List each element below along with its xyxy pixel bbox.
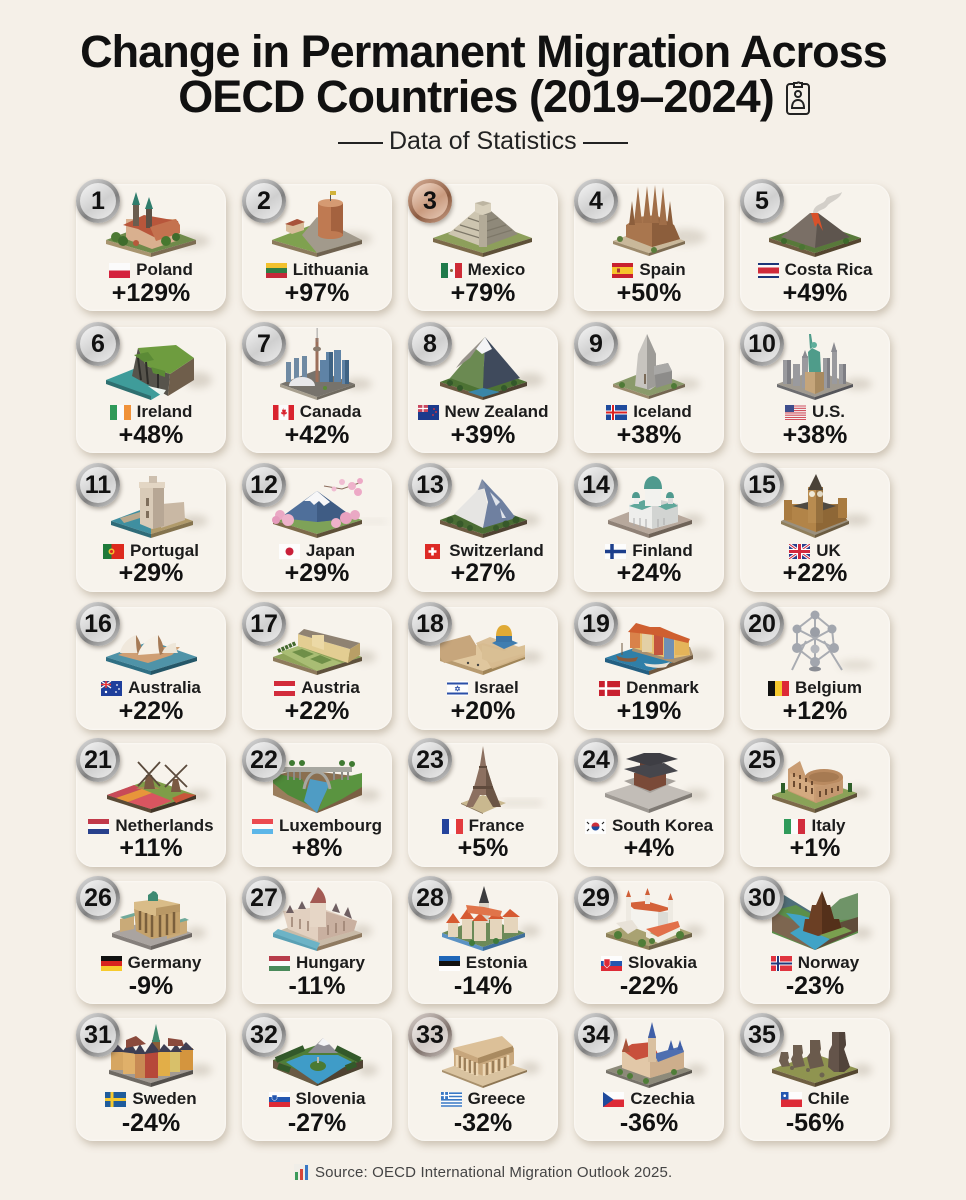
rank badge 11: 11: [85, 470, 111, 498]
label: Canada: Canada: [300, 402, 361, 421]
rank badge 8: [408, 322, 452, 366]
label: UK: UK: [816, 541, 841, 560]
value: -36%: [620, 1109, 678, 1137]
rank badge 31: [76, 1013, 120, 1057]
card: Israel: [408, 607, 558, 730]
flag: Portugal: [103, 544, 124, 559]
label: Chile: Chile: [808, 1089, 849, 1108]
flag: Lithuania: [266, 263, 287, 278]
rank badge 21: [76, 738, 120, 782]
rank badge 9: 9: [589, 330, 603, 358]
card: Poland: [76, 184, 226, 311]
subtitle: Data of Statistics: [389, 127, 577, 155]
value: +22%: [783, 559, 847, 587]
card: Czechia: [574, 1018, 724, 1141]
label: Chile: [740, 1089, 890, 1109]
title: OECD Countries (2019–2024): [178, 71, 774, 122]
flag: Luxembourg: [252, 818, 273, 834]
rank badge 19: [574, 602, 618, 646]
label: Germany: [76, 953, 226, 973]
value: +1%: [790, 834, 840, 862]
flag: Belgium: [768, 680, 789, 696]
card: Switzerland: [408, 468, 558, 592]
rank badge 13: 13: [416, 470, 444, 498]
rank badge 15: [740, 463, 784, 507]
icon: Eiffel Tower: [408, 743, 558, 823]
label: Belgium: Belgium: [795, 678, 862, 697]
rank badge 17: [242, 602, 286, 646]
flag: Slovakia: [601, 956, 622, 970]
rank badge 11: [76, 463, 120, 507]
rank badge 12: 12: [250, 470, 278, 498]
icon: Nyhavn harbour: [574, 605, 724, 685]
value: +29%: [285, 559, 349, 587]
icon: Schonbrunn Palace: [242, 605, 392, 685]
flag: Mexico: [441, 263, 462, 278]
icon: volcano: [769, 192, 861, 257]
label: Japan: Japan: [306, 541, 355, 560]
rank badge 7: [242, 322, 286, 366]
rank badge 27: 27: [250, 884, 278, 912]
rank badge 28: 28: [416, 884, 444, 912]
label: Ireland: [110, 402, 192, 421]
icon: clipboard with person: [786, 81, 810, 115]
card: Costa Rica: [740, 184, 890, 311]
label: Denmark: [574, 678, 724, 698]
label: Spain: Spain: [639, 260, 686, 279]
label: Estonia: Estonia: [466, 953, 527, 972]
flag: Ireland: [110, 405, 131, 420]
card: Spain: [574, 184, 724, 311]
rank badge 32: [242, 1013, 286, 1057]
icon: Gyeongbokgung palace: [574, 743, 724, 823]
value: +48%: [119, 421, 183, 449]
value: -32%: [454, 1109, 512, 1137]
value: -23%: [786, 972, 844, 1000]
rank badge 26: 26: [84, 884, 112, 912]
label: Italy: [740, 816, 890, 836]
rank badge 33: [408, 1013, 452, 1057]
rank badge 2: [242, 179, 286, 223]
label: France: France: [469, 816, 524, 835]
card: Lithuania: [242, 184, 392, 311]
card: Denmark: [574, 607, 724, 730]
card: Mexico: [408, 184, 558, 311]
value: -27%: [288, 1109, 346, 1137]
value: +22%: [285, 697, 349, 725]
label: Czechia: [574, 1089, 724, 1109]
card: South Korea: [574, 743, 724, 867]
icon: Parthenon: [408, 1018, 558, 1098]
label: Hungary: [242, 953, 392, 973]
label: Sweden: Sweden: [132, 1089, 197, 1108]
rank badge 16: [76, 602, 120, 646]
value: +11%: [119, 834, 183, 862]
label: Slovenia: Slovenia: [296, 1089, 365, 1108]
rank badge 27: [242, 876, 286, 920]
card: Netherlands: [76, 743, 226, 867]
icon: Bratislava Castle: [574, 881, 724, 961]
rank badge 20: [740, 602, 784, 646]
label: Austria: Austria: [301, 678, 360, 697]
rank badge 25: [740, 738, 784, 782]
value: +129%: [112, 279, 190, 307]
label: Luxembourg: [242, 816, 392, 836]
rank badge 32: 32: [250, 1020, 278, 1048]
flag: Costa Rica: [758, 263, 779, 278]
icon: Belem Tower: [111, 476, 209, 538]
label: Czechia: Czechia: [630, 1089, 695, 1108]
card: Hungary: [242, 881, 392, 1004]
icon: Wawel castle: [106, 192, 210, 257]
rank badge 31: 31: [84, 1020, 112, 1048]
label: Australia: Australia: [128, 678, 201, 697]
value: -56%: [786, 1109, 844, 1137]
icon: snow-capped mountain: [440, 337, 546, 400]
label: Italy: Italy: [811, 816, 846, 835]
label: Sweden: [76, 1089, 226, 1109]
value: +97%: [285, 279, 349, 307]
flag: Italy: [784, 818, 805, 834]
rank badge 29: [574, 876, 618, 920]
flag: Australia: [101, 680, 122, 696]
rank badge 5: 5: [755, 186, 769, 214]
value: +29%: [119, 559, 183, 587]
icon: Czech castle: [574, 1018, 724, 1098]
label: Ireland: Ireland: [137, 402, 192, 421]
rank badge 35: 35: [748, 1020, 776, 1048]
rank badge 10: 10: [748, 330, 776, 358]
value: +19%: [617, 697, 681, 725]
value: +4%: [624, 834, 674, 862]
rank badge 23: [408, 738, 452, 782]
rank badge 12: [242, 463, 286, 507]
rank badge 23: 23: [416, 746, 444, 774]
title: Change in Permanent Migration Across: [80, 26, 887, 77]
icon: Brandenburg Gate: [76, 881, 226, 961]
label: U.S.: U.S.: [812, 402, 845, 421]
label: New Zealand: New Zealand: [445, 402, 548, 421]
value: -11%: [288, 972, 345, 1000]
card: Australia: [76, 607, 226, 730]
icon: Hungarian Parliament: [242, 881, 392, 961]
rank badge 34: [574, 1013, 618, 1057]
card: Italy: [740, 743, 890, 867]
flag: Israel: [447, 680, 468, 696]
icon: windmills and tulip fields: [76, 743, 226, 823]
label: Costa Rica: Costa Rica: [785, 260, 872, 279]
flag: Canada: [273, 405, 294, 420]
label: Hungary: Hungary: [296, 953, 365, 972]
flag: United States: [785, 405, 806, 420]
card: Belgium: [740, 607, 890, 730]
label: Finland: [574, 541, 724, 561]
rank badge 18: 18: [416, 610, 444, 638]
flag: Denmark: [599, 680, 620, 696]
card: Luxembourg: [242, 743, 392, 867]
icon: Cliffs of Moher: [106, 345, 214, 400]
label: U.S.: [785, 402, 845, 421]
card: France: [408, 743, 558, 867]
rank badge 25: 25: [748, 746, 776, 774]
value: +27%: [451, 559, 515, 587]
flag: Chile: [781, 1092, 802, 1106]
label: Belgium: [740, 678, 890, 698]
rank badge 13: [408, 463, 452, 507]
rank badge 3: [408, 179, 452, 223]
icon: Adolphe Bridge gorge: [242, 743, 392, 823]
rank badge 22: 22: [250, 746, 278, 774]
rank badge 14: 14: [582, 470, 610, 498]
value: +20%: [451, 697, 515, 725]
value: -24%: [122, 1109, 180, 1137]
label: Lithuania: Lithuania: [293, 260, 368, 279]
label: Netherlands: Netherlands: [115, 816, 214, 835]
flag: Hungary: [269, 956, 290, 970]
label: Slovakia: [574, 953, 724, 973]
card: Finland: [574, 468, 724, 592]
rank badge 24: [574, 738, 618, 782]
rank badge 17: 17: [250, 610, 278, 638]
title: [80, 26, 887, 122]
card: New Zealand: [408, 327, 558, 453]
flag: Norway: [771, 956, 792, 970]
label: Portugal: Portugal: [130, 541, 199, 560]
label: Mexico: Mexico: [468, 260, 525, 279]
flag: Poland: [109, 263, 130, 278]
label: Poland: [109, 260, 193, 279]
rank badge 33: 33: [416, 1020, 444, 1048]
rank badge 1: 1: [91, 186, 105, 214]
label: Slovenia: [242, 1089, 392, 1109]
flag: Czechia: [603, 1092, 624, 1106]
value: +8%: [292, 834, 342, 862]
rank badge 4: [574, 179, 618, 223]
flag: Japan: [279, 544, 300, 559]
icon: stave church in a fjord: [740, 881, 890, 961]
value: +42%: [285, 421, 349, 449]
card: Austria: [242, 607, 392, 730]
flag: Austria: [274, 680, 295, 696]
icon: bar chart: [294, 1164, 309, 1180]
card: Slovakia: [574, 881, 724, 1004]
label: Australia: [76, 678, 226, 698]
icon: Helsinki Cathedral: [574, 468, 724, 548]
label: Denmark: Denmark: [626, 678, 699, 697]
icon: Mount Fuji with cherry blossoms: [272, 478, 363, 538]
icon: Toronto skyline: [280, 328, 373, 400]
rank badge 21: 21: [84, 746, 112, 774]
flag: New Zealand: [418, 405, 439, 420]
label: Netherlands: [76, 816, 226, 836]
flag: Switzerland: [422, 544, 443, 558]
value: +79%: [451, 279, 515, 307]
flag: France: [442, 818, 463, 834]
card: Norway: [740, 881, 890, 1004]
icon: Chichen Itza pyramid: [433, 201, 532, 257]
value: -14%: [454, 972, 512, 1000]
label: Norway: Norway: [798, 953, 859, 972]
rank badge 22: [242, 738, 286, 782]
rank badge 6: 6: [91, 330, 105, 358]
icon: Atomium: [740, 605, 890, 685]
rank badge 1: [76, 179, 120, 223]
flag: Netherlands: [88, 818, 109, 834]
label: Norway: [740, 953, 890, 973]
icon: Colosseum: [740, 743, 890, 823]
label: Finland: Finland: [632, 541, 693, 560]
card: Ireland: [76, 327, 226, 453]
source footer: Source: OECD International Migration Outlook 2025.: [315, 1164, 672, 1181]
card: Sweden: [76, 1018, 226, 1141]
rank badge 14: [574, 463, 618, 507]
rank badge 35: [740, 1013, 784, 1057]
rank badge 15: 15: [748, 470, 776, 498]
rank badge 7: 7: [257, 330, 271, 358]
flag: South Korea: [585, 818, 606, 834]
label: Greece: [408, 1089, 558, 1109]
label: South Korea: South Korea: [612, 816, 713, 835]
label: Japan: [279, 541, 355, 560]
rank badge 4: 4: [589, 186, 603, 214]
label: Greece: Greece: [468, 1089, 525, 1108]
flag: Estonia: [439, 956, 460, 970]
icon: Matterhorn: [440, 479, 541, 538]
card: Canada: [242, 327, 392, 453]
card: Portugal: [76, 468, 226, 592]
rank badge 18: [408, 602, 452, 646]
label: Canada: [273, 402, 362, 421]
label: Slovakia: Slovakia: [628, 953, 697, 972]
value: +38%: [783, 421, 847, 449]
value: +39%: [451, 421, 515, 449]
label: France: [408, 816, 558, 836]
rank badge 28: [408, 876, 452, 920]
rank badge 9: [574, 322, 618, 366]
card: Germany: [76, 881, 226, 1004]
label: Iceland: Iceland: [633, 402, 692, 421]
label: Germany: Germany: [128, 953, 201, 972]
rank badge 3: 3: [423, 186, 437, 214]
icon: Western Wall and Dome of the Rock: [408, 605, 558, 685]
value: +12%: [783, 697, 847, 725]
label: Israel: Israel: [474, 678, 519, 697]
value: -22%: [620, 972, 678, 1000]
flag: United Kingdom: [789, 544, 810, 558]
value: -9%: [129, 972, 173, 1000]
label: Switzerland: Switzerland: [449, 541, 544, 560]
value: +22%: [119, 697, 183, 725]
icon: Hallgrimskirkja: [613, 334, 700, 399]
card: Slovenia: [242, 1018, 392, 1141]
rank badge 19: 19: [582, 610, 610, 638]
card: Chile: [740, 1018, 890, 1141]
card: Iceland: [574, 327, 724, 453]
label: Austria: [242, 678, 392, 698]
label: Poland: Poland: [136, 260, 193, 279]
rank badge 24: 24: [582, 746, 610, 774]
flag: Spain: [612, 263, 633, 278]
value: +38%: [617, 421, 681, 449]
label: Estonia: [408, 953, 558, 973]
icon: Moai statues: [740, 1018, 890, 1098]
label: Spain: [612, 260, 686, 279]
icon: Gediminas tower: [272, 191, 373, 257]
label: Mexico: [441, 260, 525, 279]
icon: Sydney Opera House: [76, 605, 226, 685]
icon: Stockholm Gamla Stan: [76, 1018, 226, 1098]
card: Estonia: [408, 881, 558, 1004]
flag: Slovenia: [269, 1092, 290, 1106]
icon: Big Ben and Westminster: [740, 468, 890, 548]
label: Israel: [408, 678, 558, 698]
card: U.S.: [740, 327, 890, 453]
value: +49%: [783, 279, 847, 307]
label: Switzerland: [408, 541, 558, 561]
flag: Finland: [605, 544, 626, 558]
rank badge 29: 29: [582, 884, 610, 912]
flag: Sweden: [105, 1092, 126, 1106]
rank badge 5: [740, 179, 784, 223]
label: Luxembourg: Luxembourg: [279, 816, 382, 835]
card: Greece: [408, 1018, 558, 1141]
rank badge 20: 20: [748, 610, 776, 638]
icon: Statue of Liberty and skyline: [777, 334, 873, 400]
rank badge 34: 34: [582, 1020, 610, 1048]
label: South Korea: [574, 816, 724, 836]
icon: Sagrada Familia: [613, 185, 707, 256]
icon: Lake Bled: [242, 1018, 392, 1098]
rank badge 30: [740, 876, 784, 920]
card: Japan: [242, 468, 392, 592]
flag: Greece: [441, 1092, 462, 1106]
value: +5%: [458, 834, 508, 862]
value: +24%: [617, 559, 681, 587]
rank badge 2: 2: [257, 186, 271, 214]
label: Iceland: [606, 402, 692, 421]
flag: Iceland: [606, 405, 627, 420]
label: UK: [740, 541, 890, 561]
rank badge 10: [740, 322, 784, 366]
icon: Tallinn old town: [408, 881, 558, 961]
rank badge 26: [76, 876, 120, 920]
value: +50%: [617, 279, 681, 307]
flag: Germany: [101, 956, 122, 970]
rank badge 8: 8: [423, 330, 437, 358]
rank badge 16: 16: [84, 610, 112, 638]
rank badge 6: [76, 322, 120, 366]
card: UK: [740, 468, 890, 592]
rank badge 30: 30: [748, 884, 776, 912]
